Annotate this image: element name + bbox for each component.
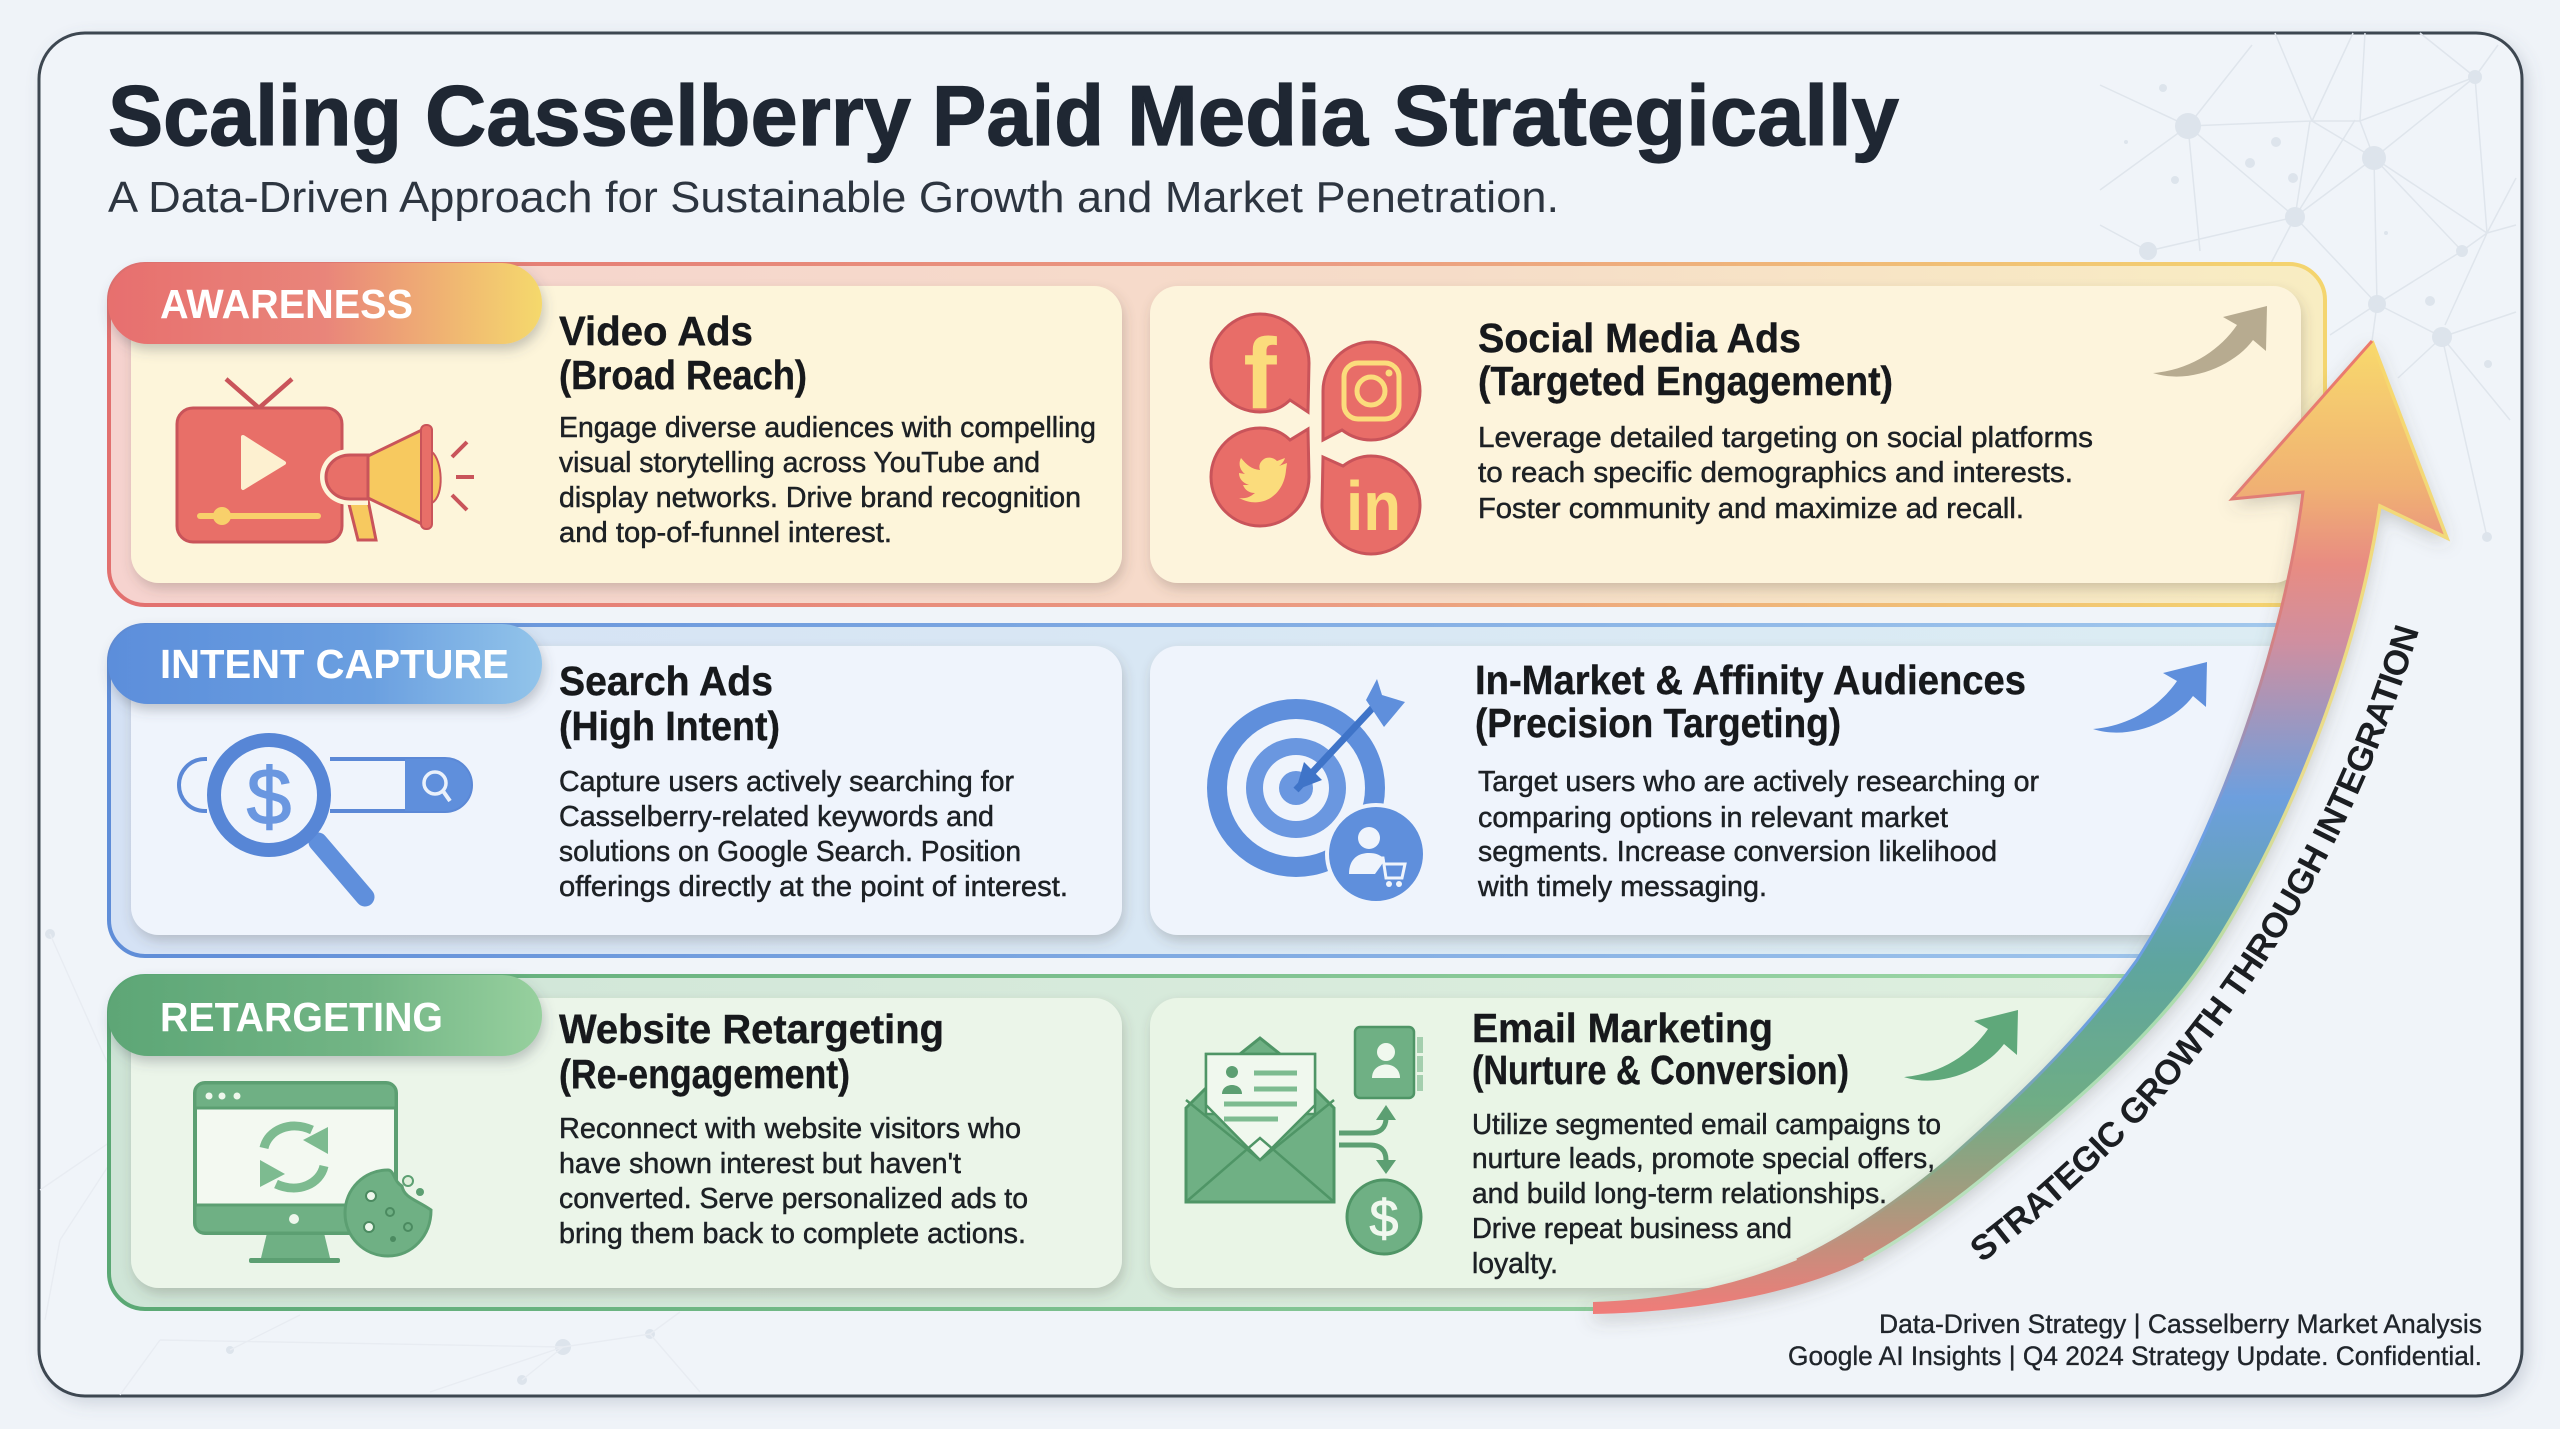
pill: retargeting: RETARGETING	[160, 994, 443, 1040]
text: search ads: (High Intent)	[559, 703, 780, 749]
text: social media ads: Leverage detailed targeting on social platforms	[1478, 422, 2093, 454]
icon: search bar with magnifier	[179, 740, 471, 897]
text: in-market audiences: Target users who are actively researching or	[1478, 766, 2039, 798]
panel: social media ads card	[1150, 286, 2301, 583]
text: in-market audiences: segments. Increase conversion likelihood	[1478, 836, 1997, 868]
text: email marketing: Utilize segmented email campaigns to	[1472, 1109, 1941, 1141]
arrow: strategic growth arrow	[1593, 341, 2447, 1314]
text: search ads: Casselberry-related keywords and	[559, 801, 994, 833]
text: in-market audiences: (Precision Targeting)	[1475, 700, 1841, 746]
text: social media ads: to reach specific demographics and interests.	[1478, 457, 2073, 489]
text: in-market audiences: comparing options in relevant market	[1478, 802, 1948, 834]
panel: retargeting band	[104, 974, 2125, 1311]
text: website retargeting: converted. Serve personalized ads to	[559, 1183, 1028, 1215]
text: social media ads: Social Media Ads	[1478, 315, 1801, 361]
footer: Data-Driven Strategy | Casselberry Market Analysis	[1879, 1309, 2482, 1339]
subtitle: A Data-Driven Approach for Sustainable Growth and Market Penetration.	[108, 173, 1559, 222]
panel: website retargeting card	[131, 998, 1122, 1288]
text: in-market audiences: with timely messaging.	[1477, 871, 1767, 903]
panel: intent capture band	[108, 624, 2450, 956]
text: video ads: (Broad Reach)	[559, 352, 807, 398]
arrow: small awareness arrow	[2153, 306, 2267, 377]
text: search ads: offerings directly at the point of interest.	[559, 871, 1068, 903]
text: email marketing: Email Marketing	[1472, 1005, 1773, 1051]
text: search ads: Search Ads	[559, 658, 773, 704]
text: video ads: and top-of-funnel interest.	[559, 517, 892, 549]
icon: target with arrow and shopper	[1207, 679, 1425, 903]
icon: social media bubbles	[1211, 314, 1420, 554]
footer	[1788, 1309, 2482, 1371]
background network pattern	[2100, 33, 2516, 537]
text: video ads: Engage diverse audiences with compelling	[559, 412, 1096, 444]
icon: social media bubbles: f	[1243, 318, 1277, 430]
text: website retargeting: Website Retargeting	[559, 1006, 944, 1052]
icon: search bar with magnifier: $	[247, 752, 291, 841]
text: email marketing: Drive repeat business and	[1472, 1213, 1792, 1245]
text: email marketing: (Nurture & Conversion)	[1472, 1047, 1849, 1093]
text: website retargeting: Reconnect with website visitors who	[559, 1113, 1021, 1145]
title: Media	[1127, 69, 1369, 164]
text: email marketing	[1472, 1005, 1941, 1280]
text: social media ads: (Targeted Engagement)	[1478, 358, 1893, 404]
icon: email, contact book and coin: $	[1370, 1190, 1399, 1248]
pill: intent capture	[108, 624, 542, 704]
text: website retargeting: bring them back to complete actions.	[559, 1218, 1026, 1250]
icon: email, contact book and coin	[1186, 1027, 1421, 1254]
text: in-market audiences: In-Market & Affinity Audiences	[1475, 657, 2026, 703]
title: Paid	[932, 69, 1104, 164]
icon: social media bubbles: in	[1346, 467, 1401, 545]
footer: Google AI Insights | Q4 2024 Strategy Update. Confidential.	[1788, 1341, 2482, 1371]
title	[108, 69, 1899, 164]
text: social media ads	[1478, 315, 2093, 525]
title: Strategically	[1393, 69, 1899, 164]
text: strategic growth through integration: STRATEGIC GROWTH THROUGH INTEGRATION	[1972, 625, 2418, 1260]
lower left network lines	[40, 934, 700, 1395]
text: email marketing: loyalty.	[1472, 1248, 1558, 1280]
panel: search ads card	[131, 646, 1122, 935]
title: Casselberry	[425, 69, 911, 164]
text: video ads: visual storytelling across YouTube and	[559, 447, 1040, 479]
icon: monitor with refresh and cookie	[195, 1083, 431, 1263]
pill: retargeting	[108, 975, 542, 1056]
text: video ads: Video Ads	[559, 308, 753, 354]
text: website retargeting: (Re-engagement)	[559, 1051, 850, 1097]
text: email marketing: nurture leads, promote special offers,	[1472, 1143, 1935, 1175]
text: website retargeting	[559, 1006, 1028, 1250]
text: website retargeting: have shown interest but haven't	[559, 1148, 961, 1180]
text: search ads	[559, 658, 1068, 903]
arrow: small retargeting arrow	[1904, 1010, 2018, 1081]
text: search ads: Capture users actively searching for	[559, 766, 1014, 798]
panel: in-market card	[1150, 646, 2450, 935]
text: video ads	[559, 308, 1096, 549]
text: email marketing: and build long-term relationships.	[1472, 1178, 1887, 1210]
text: search ads: solutions on Google Search. Position	[559, 836, 1021, 868]
panel: video ads card	[131, 286, 1122, 583]
text: video ads: display networks. Drive brand recognition	[559, 482, 1081, 514]
icon: video and megaphone	[177, 379, 474, 542]
panel: awareness band	[108, 263, 2325, 605]
pill: intent capture: INTENT CAPTURE	[160, 641, 509, 687]
panel: email marketing card	[1146, 998, 2106, 1300]
text: in-market audiences	[1475, 657, 2039, 903]
title: Scaling	[108, 69, 402, 164]
text: social media ads: Foster community and maximize ad recall.	[1478, 493, 2024, 525]
arrow: small intent arrow	[2093, 662, 2207, 733]
pill: awareness	[108, 263, 542, 344]
pill: awareness: AWARENESS	[160, 281, 413, 327]
